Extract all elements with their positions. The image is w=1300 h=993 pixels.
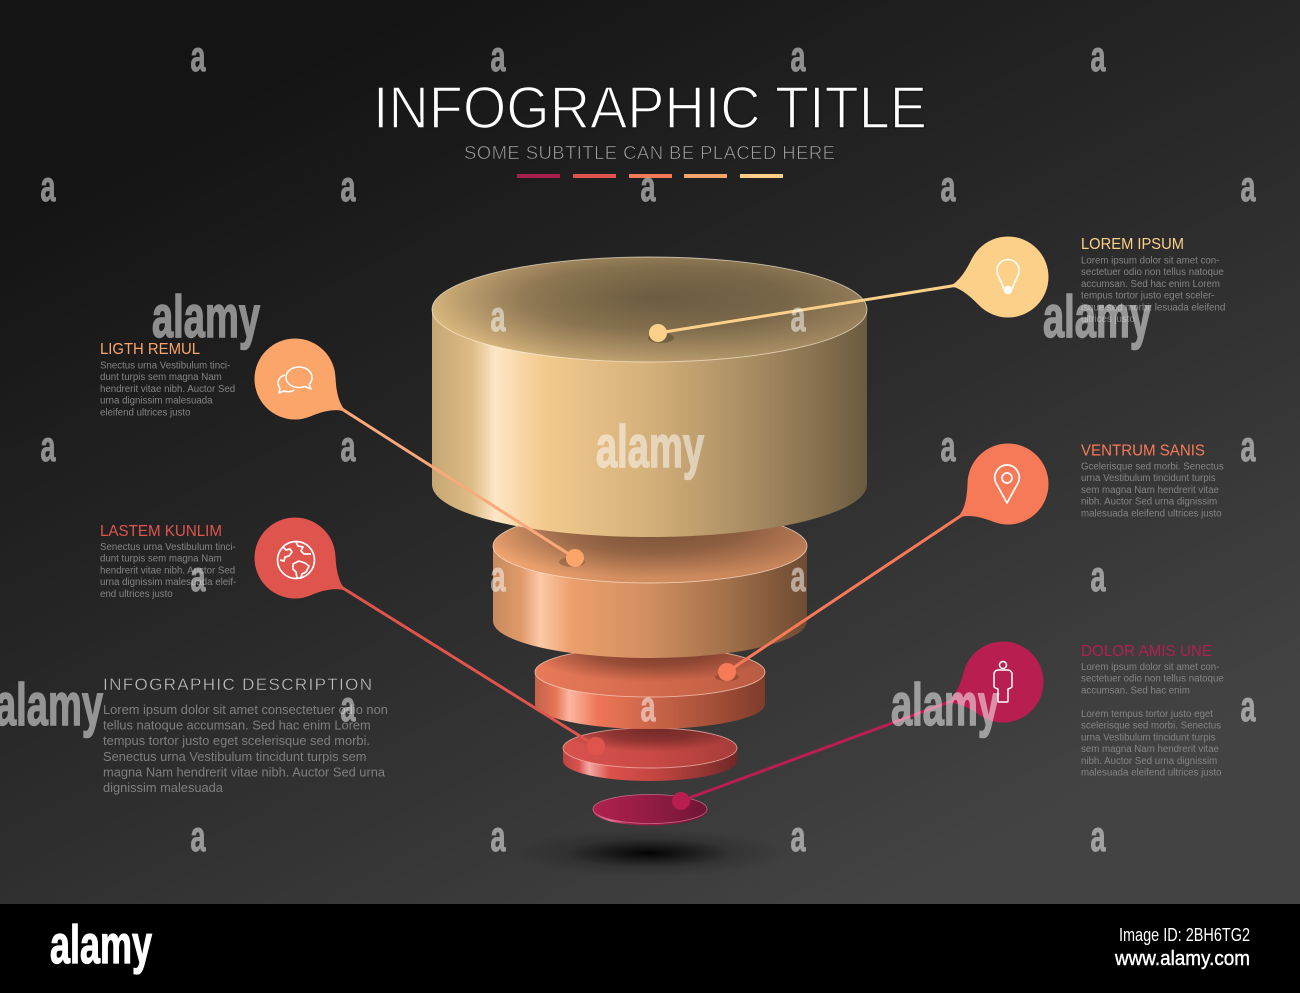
- ground shadow: [509, 829, 789, 877]
- text block: ventrum sanis: VENTRUM SANIS: [1081, 442, 1205, 460]
- text block: lorem ipsum: [1081, 236, 1225, 325]
- text block: dolor amis une: nibh. Auctor Sed urna dignissim: [1081, 756, 1217, 767]
- watermark overlay: a: [190, 813, 206, 861]
- bubble: ventrum sanis with pin icon: [955, 444, 1048, 524]
- watermark overlay: a: [1240, 163, 1256, 211]
- text block: lorem ipsum: tempus tortor justo eget sceler-: [1081, 291, 1215, 302]
- text block: dolor amis une: Lorem ipsum dolor sit amet con-: [1081, 662, 1219, 673]
- subtitle: SOME SUBTITLE CAN BE PLACED HERE: [464, 142, 835, 163]
- text block: lastem kunlim: hendrerit vitae nibh. Auctor Sed: [100, 565, 235, 576]
- text block: infographic description: dignissim malesuada: [103, 780, 224, 795]
- text block: lorem ipsum: sectetuer odio non tellus natoque: [1081, 267, 1224, 278]
- icon: light bulb: [997, 260, 1019, 294]
- website: www.alamy.com: [1114, 948, 1250, 970]
- watermark overlay: a: [640, 163, 656, 211]
- watermark overlay: a: [190, 553, 206, 601]
- watermark overlay: a: [490, 293, 506, 341]
- icon: person: [994, 662, 1012, 702]
- text block: ligth remul: Snectus urna Vestibulum tinci-: [100, 360, 230, 372]
- watermark overlay: a: [790, 553, 806, 601]
- watermark overlay: a: [640, 683, 656, 731]
- text block: infographic description: Lorem ipsum dolor sit amet consectetuer odio non: [103, 702, 388, 717]
- text block: lastem kunlim: LASTEM KUNLIM: [100, 523, 222, 540]
- text block: ventrum sanis: malesuada eleifend ultrices justo: [1081, 508, 1222, 519]
- funnel cylinder 5: [593, 794, 707, 826]
- text block: infographic description: INFOGRAPHIC DESCRIPTION: [103, 675, 372, 694]
- watermark overlay: a: [1090, 813, 1106, 861]
- watermark overlay: a: [490, 813, 506, 861]
- watermark overlay: a: [1240, 423, 1256, 471]
- colour legend bars: [517, 174, 783, 178]
- icon: map pin: [995, 465, 1019, 503]
- text block: infographic description: magna Nam hendrerit vitae nibh. Auctor Sed urna: [103, 764, 386, 779]
- text block: infographic description: [103, 675, 388, 795]
- text block: ligth remul: [100, 341, 235, 418]
- watermark overlay: a: [340, 423, 356, 471]
- text block: lorem ipsum: ultrices justo: [1081, 314, 1135, 325]
- text block: ligth remul: LIGTH REMUL: [100, 341, 200, 358]
- text block: ligth remul: hendrerit vitae nibh. Auctor Sed: [100, 384, 235, 395]
- text block: dolor amis une: sem magna Nam hendrerit vitae: [1081, 744, 1219, 755]
- text block: lastem kunlim: dunt turpis sem magna Nam: [100, 554, 222, 565]
- watermark overlay: alamy: [1043, 284, 1151, 350]
- text block: ventrum sanis: [1081, 442, 1224, 519]
- text block: ventrum sanis: sem magna Nam hendrerit vitae: [1081, 485, 1219, 496]
- text block: ligth remul: eleifend ultrices justo: [100, 407, 190, 418]
- watermark overlay: a: [40, 423, 56, 471]
- text block: ligth remul: dunt turpis sem magna Nam: [100, 372, 222, 383]
- watermark overlay: a: [340, 683, 356, 731]
- text block: dolor amis une: accumsan. Sed hac enim: [1081, 685, 1190, 696]
- connector 2: ligth remul: [338, 406, 585, 567]
- text block: dolor amis une: DOLOR AMIS UNE: [1081, 643, 1212, 660]
- connector 4: lastem kunlim: [338, 585, 605, 755]
- watermark overlay: a: [1240, 683, 1256, 731]
- title: INFOGRAPHIC TITLE: [373, 75, 927, 141]
- watermark overlay: a: [790, 813, 806, 861]
- bubble: lastem kunlim with globe icon: [254, 518, 349, 598]
- funnel cylinder 4: [562, 728, 738, 781]
- text block: dolor amis une: urna Vestibulum tincidunt turpis: [1081, 732, 1216, 743]
- text block: ventrum sanis: urna Vestibulum tincidunt turpis: [1081, 473, 1216, 484]
- footer logo: alamy: [50, 915, 152, 975]
- icon: speech bubbles: [278, 367, 312, 393]
- text block: dolor amis une: Lorem tempus tortor justo eget: [1081, 709, 1213, 720]
- watermark overlay: alamy: [891, 672, 999, 738]
- funnel cylinder 1: [432, 256, 868, 537]
- connector 5: dolor amis une: [672, 698, 960, 810]
- bubble: ligth remul with chat icon: [254, 338, 349, 420]
- funnel cylinder 2: [492, 526, 808, 658]
- text block: lastem kunlim: end ultrices justo: [100, 589, 173, 600]
- text block: dolor amis une: malesuada eleifend ultrices justo: [1081, 768, 1222, 778]
- text block: lorem ipsum: Lorem ipsum dolor sit amet con-: [1081, 256, 1219, 266]
- text block: ligth remul: urna dignissim malesuada: [100, 396, 213, 407]
- watermark overlay: a: [1090, 33, 1106, 81]
- text block: infographic description: Senectus urna Vestibulum tincidunt turpis sem: [103, 749, 366, 764]
- image id: Image ID: 2BH6TG2: [1119, 925, 1250, 945]
- connector 1: lorem ipsum: [648, 284, 965, 343]
- watermark overlay: a: [490, 553, 506, 601]
- watermark overlay: a: [190, 33, 206, 81]
- watermark overlay: alamy: [596, 414, 704, 480]
- watermark overlay: a: [490, 33, 506, 81]
- text block: lastem kunlim: [100, 523, 236, 600]
- watermark overlay: a: [940, 423, 956, 471]
- watermark overlay: alamy: [152, 284, 260, 350]
- funnel cylinder 3: [534, 653, 766, 729]
- text block: lorem ipsum: accumsan. Sed hac enim Lorem: [1081, 279, 1220, 290]
- text block: ventrum sanis: nibh. Auctor Sed urna dignissim: [1081, 497, 1217, 508]
- text block: infographic description: tellus natoque accumsan. Sed hac enim Lorem: [103, 718, 371, 733]
- bubble: dolor amis une with person icon: [943, 642, 1044, 722]
- text block: dolor amis une: [1081, 643, 1224, 778]
- text block: dolor amis une: scelerisque sed morbi. Senectus: [1081, 721, 1221, 732]
- connector 3: ventrum sanis: [715, 511, 968, 681]
- text block: lorem ipsum: LOREM IPSUM: [1081, 236, 1184, 253]
- text block: ventrum sanis: Gcelerisque sed morbi. Senectus: [1081, 462, 1224, 472]
- text block: dolor amis une: sectetuer odio non tellus natoque: [1081, 674, 1224, 685]
- watermark overlay: a: [340, 163, 356, 211]
- icon: globe: [278, 542, 314, 578]
- watermark overlay: a: [1090, 553, 1106, 601]
- watermark overlay: a: [40, 163, 56, 211]
- watermark overlay: a: [790, 293, 806, 341]
- text block: lorem ipsum: isque sed morbi. lesuada eleifend: [1081, 302, 1225, 313]
- text block: lastem kunlim: urna dignissim malesuada eleif-: [100, 577, 236, 588]
- bubble: lorem ipsum with bulb icon: [947, 236, 1048, 318]
- footer bar: [0, 904, 1300, 993]
- text block: lastem kunlim: Senectus urna Vestibulum tinci-: [100, 542, 236, 553]
- text block: infographic description: tempus tortor justo eget scelerisque sed morbi.: [103, 733, 370, 748]
- watermark overlay: a: [940, 163, 956, 211]
- watermark overlay: a: [790, 33, 806, 81]
- watermark overlay: alamy: [0, 672, 103, 738]
